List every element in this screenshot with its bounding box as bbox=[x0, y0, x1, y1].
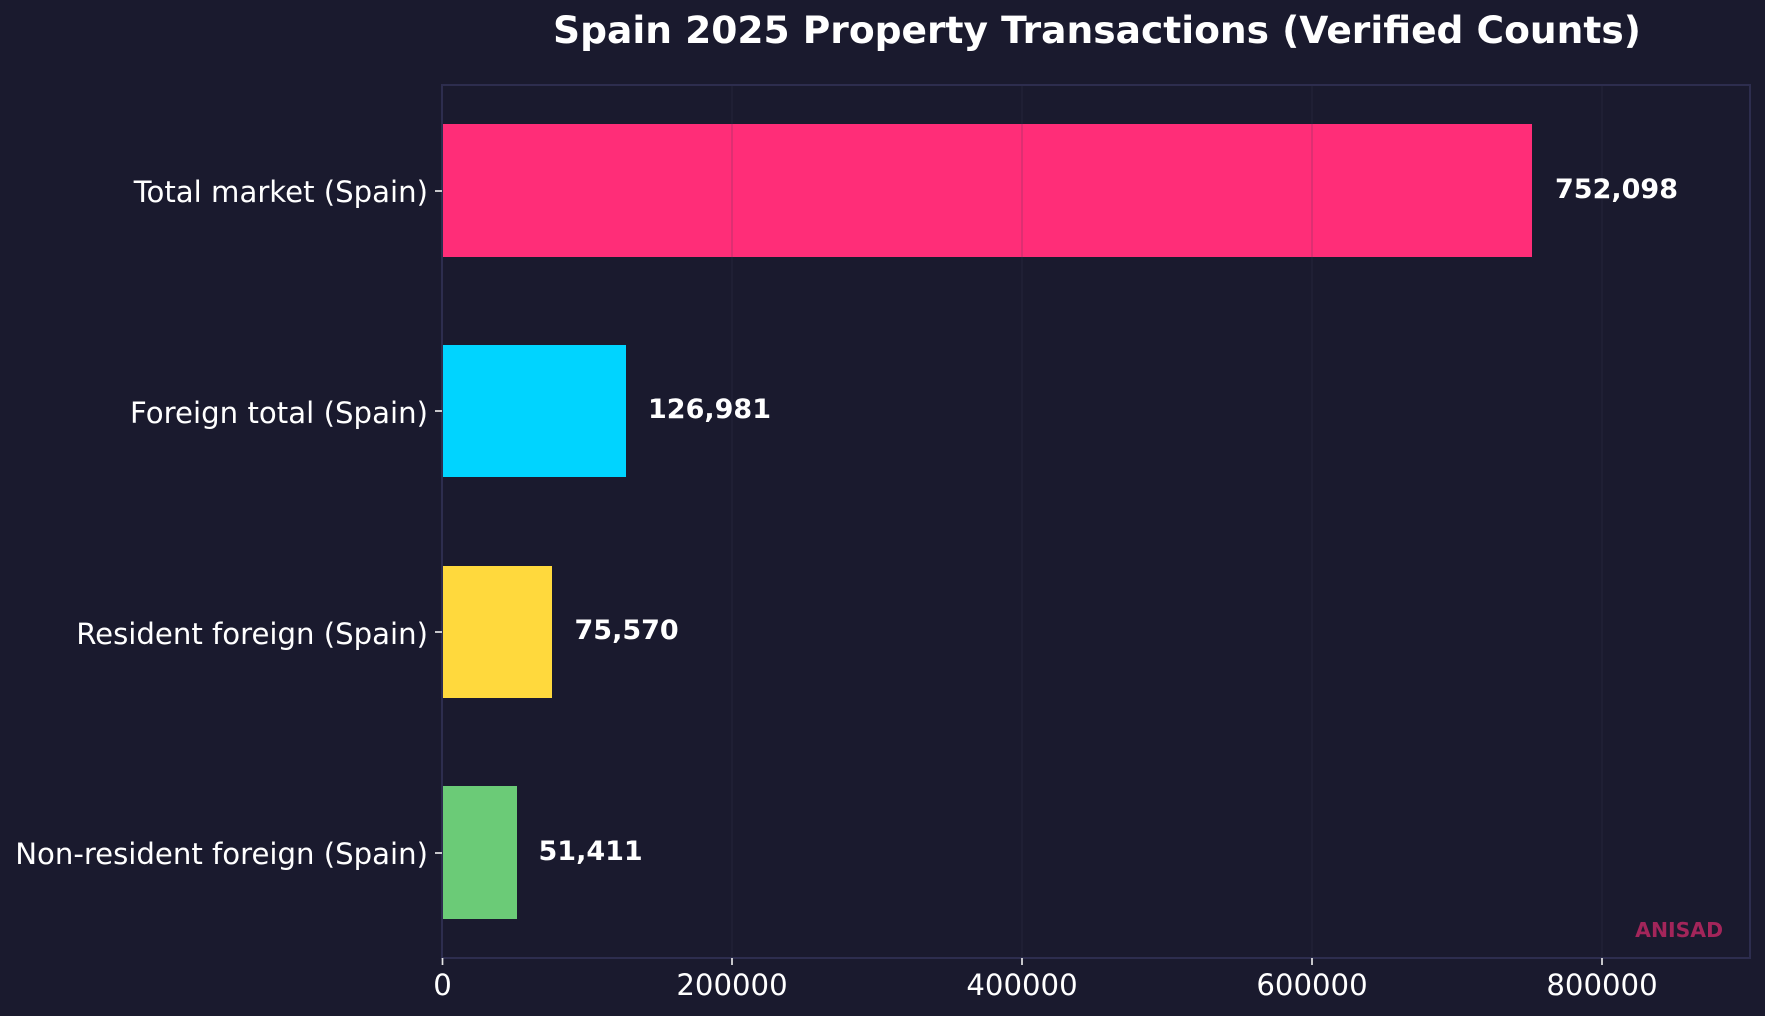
y axis labels: Non-resident foreign (Spain) bbox=[15, 837, 428, 871]
watermark: ANISAD bbox=[1635, 918, 1723, 942]
y axis labels: Foreign total (Spain) bbox=[130, 396, 428, 430]
x axis labels: 600000 bbox=[1256, 968, 1368, 1002]
y axis labels: Total market (Spain) bbox=[133, 175, 428, 209]
y axis labels bbox=[15, 175, 428, 871]
value labels: 752,098 bbox=[1555, 174, 1678, 205]
value labels: 75,570 bbox=[574, 615, 679, 646]
bar: resident foreign bbox=[443, 566, 552, 698]
value labels: 126,981 bbox=[648, 394, 771, 425]
x axis labels bbox=[433, 968, 1658, 1002]
title: Spain 2025 Property Transactions (Verified Counts) bbox=[553, 8, 1641, 52]
bar: total market bbox=[443, 124, 1532, 257]
bar: non-resident foreign bbox=[443, 786, 517, 919]
bar: foreign total bbox=[443, 345, 626, 477]
value labels bbox=[538, 174, 1678, 867]
x axis labels: 800000 bbox=[1546, 968, 1658, 1002]
value labels: 51,411 bbox=[538, 836, 643, 867]
x axis labels: 200000 bbox=[676, 968, 788, 1002]
x axis labels: 400000 bbox=[966, 968, 1078, 1002]
y axis labels: Resident foreign (Spain) bbox=[76, 617, 428, 651]
x axis labels: 0 bbox=[433, 968, 452, 1002]
